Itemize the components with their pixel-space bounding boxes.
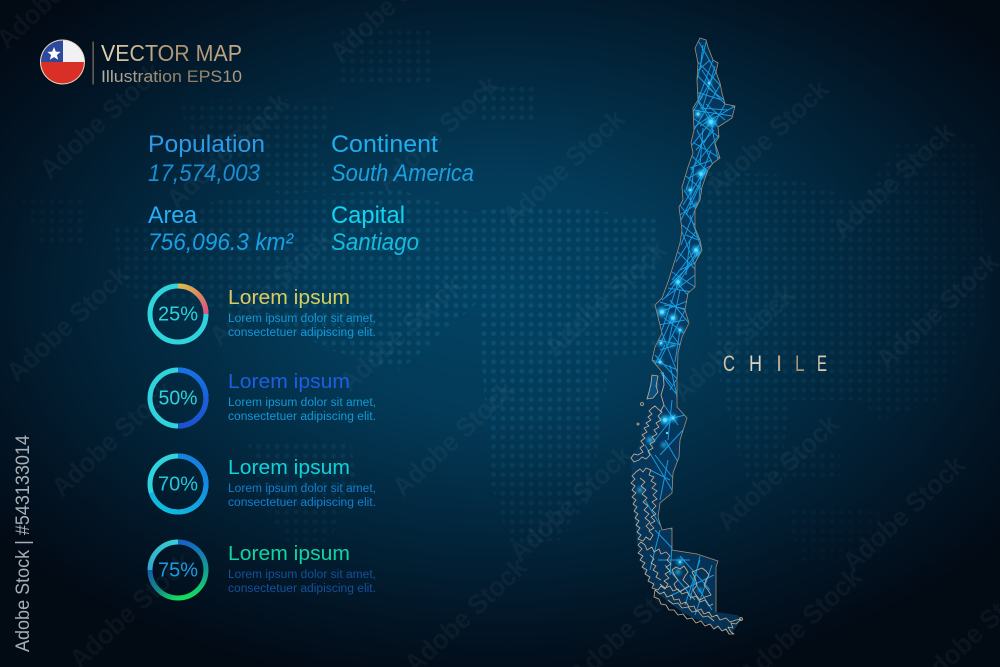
donut: 50% — [150, 370, 206, 426]
stat: 70 percent — [150, 456, 376, 512]
stat: 25 percent — [150, 286, 376, 342]
watermark: repeated Adobe Stock text: Adobe Stock — [504, 439, 638, 567]
watermark: repeated Adobe Stock text: Adobe Stock — [1, 259, 135, 387]
body text: consectetuer adipiscing elit. — [228, 327, 376, 339]
watermark: repeated Adobe Stock text: Adobe Stock — [497, 103, 631, 231]
map outline — [652, 38, 735, 612]
fact: area: Area — [148, 202, 198, 229]
label: CHILE: E — [817, 351, 827, 376]
stat: 50 percent: 50% — [158, 386, 198, 410]
watermark: repeated Adobe Stock text: Adobe Stock — [711, 408, 845, 536]
heading: lorem ipsum: Lorem ipsum — [228, 543, 350, 565]
stat: 75 percent: 75% — [158, 558, 198, 582]
heading: lorem ipsum: Lorem ipsum — [228, 371, 350, 393]
title: VECTOR MAP: VECTOR MAP — [101, 40, 242, 66]
watermark: repeated Adobe Stock text: Adobe Stock — [667, 279, 801, 407]
body text: Lorem ipsum dolor sit amet, — [228, 397, 376, 409]
watermark: repeated Adobe Stock text: Adobe Stock — [334, 269, 468, 397]
watermark: repeated Adobe Stock text: Adobe Stock — [34, 56, 168, 184]
donut: 70% — [150, 456, 206, 512]
fact: capital: Santiago — [331, 229, 419, 256]
label: CHILE: C — [723, 351, 735, 376]
watermark: repeated Adobe Stock text: Adobe Stock — [539, 234, 673, 362]
heading: lorem ipsum: Lorem ipsum — [228, 287, 350, 309]
watermark: repeated Adobe Stock text: Adobe Stock — [46, 374, 180, 502]
map: Chile polygon mesh — [631, 38, 742, 634]
watermark: repeated Adobe Stock text: Adobe Stock — [204, 223, 338, 351]
fact: area — [148, 202, 294, 256]
map bright points — [654, 82, 713, 563]
fact: population: Population — [148, 131, 265, 158]
fact: continent — [331, 131, 474, 187]
map Chiloe island and southern fjords — [631, 372, 742, 634]
watermark: Adobe Stock vertical id: Adobe Stock | #543133014 — [12, 435, 34, 652]
body text: Lorem ipsum dolor sit amet, — [228, 313, 376, 325]
body text: consectetuer adipiscing elit. — [228, 583, 376, 595]
stat: 75 percent — [150, 542, 376, 598]
body text: consectetuer adipiscing elit. — [228, 411, 376, 423]
label: CHILE: L — [795, 351, 804, 376]
donut: 75% — [150, 542, 206, 598]
label: CHILE: I — [776, 351, 782, 376]
stat: 70 percent: 70% — [158, 472, 198, 496]
mesh lines — [645, 42, 735, 615]
fact: area: 756,096.3 km² — [148, 229, 294, 256]
donut: 25% — [150, 286, 206, 342]
fact: continent: Continent — [331, 131, 438, 158]
map fill — [631, 38, 742, 633]
body text: Lorem ipsum dolor sit amet, — [228, 483, 376, 495]
fact: capital — [331, 202, 419, 256]
icon: Chile flag — [40, 40, 86, 85]
watermark: repeated Adobe Stock text: Adobe Stock — [161, 86, 295, 214]
body text: Lorem ipsum dolor sit amet, — [228, 569, 376, 581]
watermark: repeated Adobe Stock text: Adobe Stock — [827, 116, 961, 244]
fact: continent: South America — [331, 160, 474, 187]
fact: capital: Capital — [331, 202, 405, 229]
watermark: repeated Adobe Stock text: Adobe Stock — [837, 449, 971, 577]
label: CHILE — [723, 351, 827, 376]
map glow nodes — [638, 80, 716, 592]
body text: consectetuer adipiscing elit. — [228, 497, 376, 509]
stat: 25 percent: 25% — [158, 302, 198, 326]
subtitle: Illustration EPS10: Illustration EPS10 — [101, 67, 242, 86]
stat: 50 percent — [150, 370, 376, 426]
fact: population: 17,574,003 — [148, 160, 261, 187]
heading: lorem ipsum: Lorem ipsum — [228, 457, 350, 479]
watermark: repeated Adobe Stock text: Adobe Stock — [701, 73, 835, 201]
fact: population — [148, 131, 265, 187]
header divider — [93, 42, 94, 84]
watermark: repeated Adobe Stock text: Adobe Stock — [387, 374, 521, 502]
label: CHILE: H — [749, 351, 762, 376]
watermark: repeated Adobe Stock text: Adobe Stock — [371, 69, 505, 197]
facts: country statistics — [148, 131, 474, 256]
header: flag badge and title — [40, 40, 242, 86]
